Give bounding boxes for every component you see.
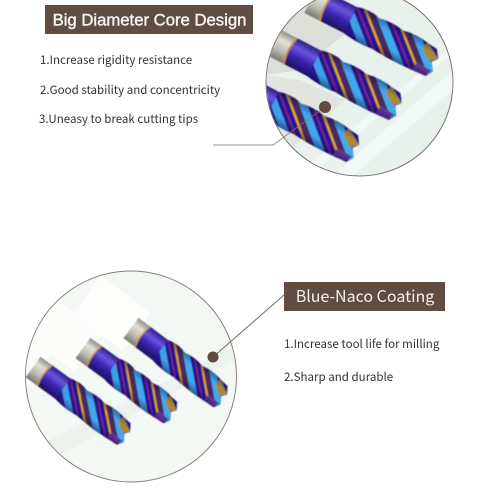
text block: coating benefits: 2.Sharp and durable [284,369,393,385]
text block: core design benefits: 2.Good stability and concentricity [40,82,220,98]
text block: core design benefits: 3.Uneasy to break cutting tips [39,111,198,127]
image: three end mills in close-up circle [266,0,454,176]
panel: blue-naco coating [0,271,445,482]
heading: big diameter core design [45,5,253,34]
panel: big diameter core design [39,0,455,178]
callout: leader line and dot to core [213,101,331,145]
text block: core design benefits: 1.Increase rigidity resistance [40,52,192,68]
image: three coated end mills in circle [25,270,237,482]
heading: big diameter core design: Big Diameter Core Design [53,10,246,30]
text block: coating benefits [284,336,440,385]
callout: leader line and dot to coating [208,295,284,362]
text block: coating benefits: 1.Increase tool life for milling [284,336,440,352]
text block: core design benefits [39,52,220,127]
heading: blue-naco coating: Blue-Naco Coating [296,283,434,307]
